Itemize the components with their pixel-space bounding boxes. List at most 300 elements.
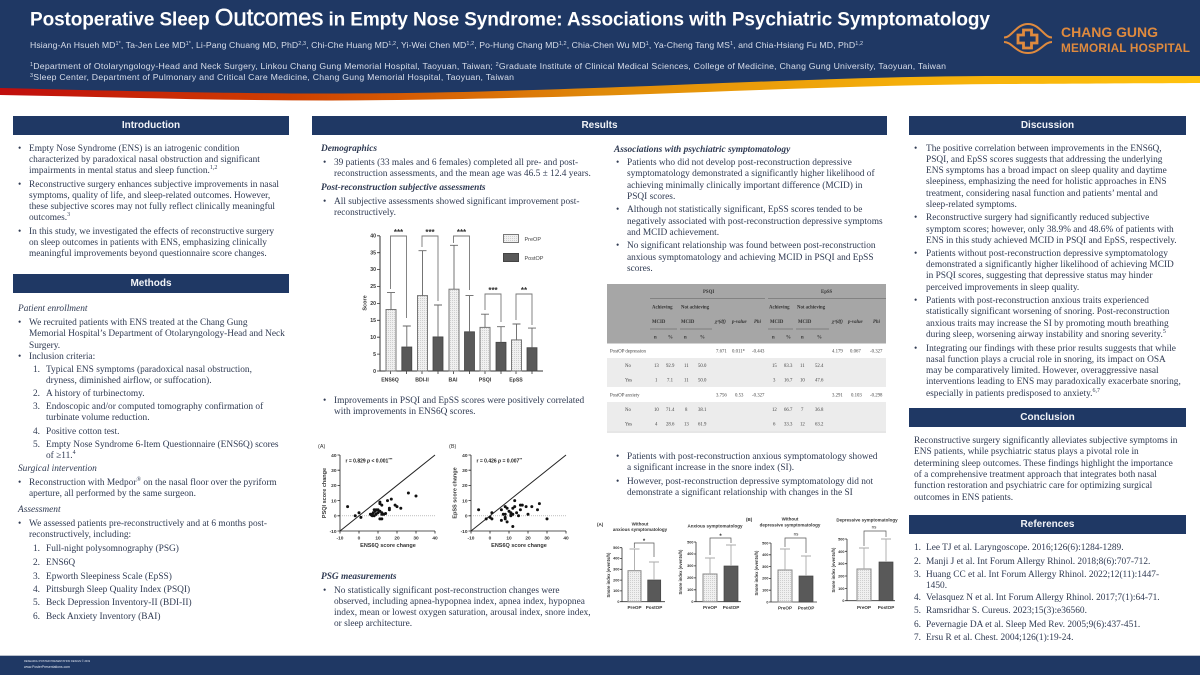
text: methods: aperture, all performed by the same surgeon. [29,489,196,499]
table: MCID achievement by psychiatric status: Phi [754,320,762,325]
text: discussion bullets: • [914,344,917,354]
text: snore index findings: Patients with post-reconstruction anxious symptomatology showed [627,452,877,462]
snore index chart A2: anxious symptomatology [678,524,743,610]
text: methods: 5. [33,598,40,608]
authors: 1,2 [855,41,863,47]
heading: Results: Results [581,120,618,131]
table: MCID achievement by psychiatric status: 13 [654,364,659,369]
text: PSG measurements: index, mean or lowest oxygen saturation, arousal index, snore index, [334,608,591,618]
text: methods: Typical ENS symptoms (paradoxical nasal obstruction, [46,365,252,375]
scatter plot A: PSQI vs ENS6Q change: 40 [432,536,438,542]
table: MCID achievement by psychiatric status: -0.327 [752,394,765,398]
table: MCID achievement by psychiatric status: 7.1 [667,378,674,384]
text: reference list: 1450. [926,581,947,591]
table: MCID achievement by psychiatric status: % [668,336,673,340]
text: PSG measurements: observed, including apnea-hypopnea index, apnea index, hypopnea [334,597,585,607]
text: introduction bullets: Empty Nose Syndrome (ENS) is an iatrogenic condition [29,144,239,154]
text: discussion bullets: may be comparatively limited. However, overaggressive nasal [926,366,1159,376]
text: demographics: 39 patients (33 males and 6 females) completed all pre- and post- [334,158,578,168]
text: methods: Pittsburgh Sleep Quality Index (PSQI) [46,585,190,595]
snore index chart A1: without anxious symptomatology: 200 [613,578,620,582]
bar chart: scores before and after surgery: ENS6Q [381,378,399,384]
text: demographics [320,144,591,218]
text: methods: Beck Depression Inventory-II (BDI-II) [46,598,192,608]
text: demographics: reconstructively. [334,208,396,218]
text: PSG measurements: PSG measurements [321,572,397,582]
table: MCID achievement by psychiatric status: % [700,336,705,340]
text: discussion bullets: • [914,249,917,259]
scatter plot B: EpSS vs ENS6Q change: 0 [465,514,468,520]
bar chart: scores before and after surgery: 40 [370,234,376,240]
authors: 1* [115,41,122,47]
text: methods: ENS6Q [46,558,75,568]
text: reference list: 7. [914,633,921,643]
snore index chart A1: without anxious symptomatology: anxious symptomatology [613,527,668,532]
text: introduction bullets: symptoms, quality of life, and sleep-related outcomes. However, [29,191,270,201]
heading: Conclusion [909,408,1186,427]
bar chart: scores before and after surgery: 10 [370,335,376,341]
scatter plot B: EpSS vs ENS6Q change: 30 [544,536,550,542]
snore index chart A1: without anxious symptomatology: 0 [617,600,620,604]
snore index chart B2: depressive symptomatology: PostOP [878,605,894,610]
table: MCID achievement by psychiatric status: Not achieving [797,306,826,310]
text: methods: 1. [33,365,40,375]
snore index chart B1: without depressive symptomatology: 400 [762,553,768,557]
snore index chart A2: anxious symptomatology: 0 [691,600,694,604]
text: discussion bullets: especially in patients predisposed to anxiety.6,7 [926,388,1100,399]
table: MCID achievement by psychiatric status: 52.4 [815,364,824,369]
scatter plot A: PSQI vs ENS6Q change: 20 [331,483,337,489]
table: MCID achievement by psychiatric status: 63.2 [815,422,824,428]
text: reference list: Ersu R et al. Chest. 2004;126(1):19-24. [926,633,1073,643]
text: reference list: Ramsridhar S. Cureus. 2023;15(3):e36560. [926,606,1087,616]
chart legend: PostOP [524,256,544,262]
table: MCID achievement by psychiatric status: 61.9 [698,422,707,428]
text: snore index findings: • [616,477,619,487]
authors: , Po-Hung Chang MD [474,40,559,50]
snore index chart A2: anxious symptomatology: 300 [687,564,694,568]
text: correlation finding: Improvements in PSQI and EpSS scores were positively correlated [334,396,584,406]
table: MCID achievement by psychiatric status: 92.9 [666,364,675,369]
text: correlation finding [323,396,584,417]
table: MCID achievement by psychiatric status: 1 [655,378,658,384]
text: discussion bullets: during sleep, worsening airway instability and snoring severity.5 [926,329,1166,340]
text: methods: We assessed patients pre-reconstructively and at 6 months post- [29,519,267,529]
table: MCID achievement by psychiatric status: 10 [654,408,659,413]
authors: , Ya-Cheng Tang MS [649,40,730,50]
snore index chart B1: without depressive symptomatology: 200 [762,576,768,580]
bar chart: scores before and after surgery: *** [394,228,404,237]
table: MCID achievement by psychiatric status: 0.011* [732,350,746,354]
table: MCID achievement by psychiatric status: 15 [772,364,777,369]
text: associations with psychiatric symptomatology: symptomatology demonstrated a significantly higher likelihood of [627,169,875,179]
table: MCID achievement by psychiatric status: 66.7 [784,408,793,413]
scatter plot B: EpSS vs ENS6Q change: ** [519,458,523,462]
table: MCID achievement by psychiatric status: 8 [685,408,688,413]
table: MCID achievement by psychiatric status: 3.291 [832,394,843,398]
bar chart: scores before and after surgery: 0 [373,369,376,375]
scatter plot A: PSQI vs ENS6Q change: r = 0.829 p < 0.001 [346,458,388,464]
affiliations line one: Graduate Institute of Clinical Medical Sciences, College of Medicine, Chang Gung University, Taoyuan, Taiwan [499,61,946,71]
scatter plot B: EpSS vs ENS6Q change: -10 [468,536,475,542]
snore index chart B1: without depressive symptomatology: Snore index (events/h) [754,550,759,595]
text: discussion bullets: Patients without post-reconstruction depressive symptomatology [926,249,1168,259]
text: associations with psychiatric symptomatology: • [616,205,619,215]
text: associations with psychiatric symptomatology: Although not statistically significant, EpSS scores tended to be [627,205,862,215]
text: associations with psychiatric symptomatology: • [616,241,619,251]
text: demographics: Demographics [321,144,377,154]
text: correlation finding: • [323,396,326,406]
snore index chart A1: without anxious symptomatology: PreOP [627,605,642,610]
table: MCID achievement by psychiatric status: 47.6 [815,378,824,384]
scatter plot B: EpSS vs ENS6Q change: (B) [449,444,456,450]
table: MCID achievement by psychiatric status: Yes [625,422,632,428]
text: snore index findings: demonstrate a significant relationship with changes in the SI [627,488,853,498]
bar chart: scores before and after surgery: BDI-II [415,378,429,384]
affiliations line one: 2 [496,62,499,68]
snore index chart B1: without depressive symptomatology: PostOP [798,606,814,610]
table: MCID achievement by psychiatric status: % [817,336,822,340]
table: MCID achievement by psychiatric status: 36.8 [815,408,824,413]
text: methods: A history of turbinectomy. [46,389,145,399]
table: MCID achievement by psychiatric status: -0.443 [752,350,765,354]
table: MCID achievement by psychiatric status: Achieving [652,306,673,310]
bar chart: scores before and after surgery: EpSS [509,378,523,384]
snore index chart B2: depressive symptomatology: Depressive symptomatology [836,518,898,522]
snore index chart A2: anxious symptomatology: Anxious symptomatology [687,524,743,528]
bar chart: scores before and after surgery: Score [362,295,368,311]
scatter plot B: EpSS vs ENS6Q change: 10 [506,536,512,542]
text: demographics: • [323,197,326,207]
text: methods: 1. [33,544,40,554]
table: MCID achievement by psychiatric status: 50.0 [698,364,707,369]
scatter plot B: EpSS vs ENS6Q change: 10 [462,498,468,504]
text: methods: Epworth Sleepiness Scale (EpSS) [46,572,172,582]
text: associations with psychiatric symptomatology: achieving minimally clinically important difference (MCID) in [627,181,862,191]
text: discussion bullets: PSQI, and EpSS scores suggests that addressing the underlying [926,155,1162,165]
table: MCID achievement by psychiatric status [607,284,886,432]
authors: 1 [646,41,649,47]
snore index chart B2: depressive symptomatology: ns [872,524,877,530]
scatter plot A: PSQI vs ENS6Q change: 40 [331,453,337,459]
snore index chart B1: without depressive symptomatology: depressive symptomatology [760,522,821,528]
text: methods: • [18,519,21,529]
table: MCID achievement by psychiatric status: -0.298 [870,394,883,398]
table: MCID achievement by psychiatric status: PostOP depression [610,350,647,354]
table: MCID achievement by psychiatric status: 0.103 [851,394,862,398]
text: associations with psychiatric symptomatology: anxious symptomatology and achieving MCID in PSQI and EpSS [627,253,874,263]
table: MCID achievement by psychiatric status: 28.6 [666,422,675,428]
logo: Chang Gung Memorial Hospital: MEMORIAL HOSPITAL [1061,41,1190,55]
text: methods: 4. [33,585,40,595]
table: MCID achievement by psychiatric status: MCID [798,320,812,325]
scatter plot A: PSQI vs ENS6Q change: 10 [375,536,381,542]
table: MCID achievement by psychiatric status: p-value [731,320,748,325]
text: discussion bullets: The positive correlation between improvements in the ENS6Q, [926,144,1162,154]
bar chart: scores before and after surgery: *** [488,286,499,295]
text: methods: • [18,478,21,488]
text: reference list: 6. [914,620,921,630]
text: methods: Full-night polysomnography (PSG) [46,544,179,554]
text: snore index findings: However, post-reconstruction depressive symptomatology did not [627,477,873,487]
table: MCID achievement by psychiatric status: χ²(df) [714,319,726,325]
table: MCID achievement by psychiatric status: 7 [801,408,804,413]
scatter plot A: PSQI vs ENS6Q change: PSQI score change [322,468,328,518]
text: discussion bullets: • [914,213,917,223]
table: MCID achievement by psychiatric status: 11 [684,364,689,369]
text: discussion bullets: • [914,144,917,154]
snore index chart B2: depressive symptomatology: 100 [838,587,844,591]
snore index chart A1: without anxious symptomatology: 100 [613,589,620,593]
text: methods: reconstructively, including: [29,530,131,540]
snore index chart A2: anxious symptomatology: 500 [687,540,694,544]
snore index chart B2: depressive symptomatology: PreOP [857,605,871,610]
scatter plot A: PSQI vs ENS6Q change: 10 [331,498,337,504]
snore index chart A1: without anxious symptomatology: 500 [613,546,620,550]
scatter plot B: EpSS vs ENS6Q change: 40 [563,536,569,542]
table: MCID achievement by psychiatric status: 10 [800,378,805,384]
authors: , Ta-Jen Lee MD [121,40,186,50]
snore index chart A2: anxious symptomatology: PostOP [723,605,739,610]
heading: Methods: Methods [130,278,172,289]
text: associations with psychiatric symptomatology: scores. [627,264,653,274]
bar chart: scores before and after surgery: 20 [370,301,376,307]
text: methods: Surgical intervention [18,464,97,474]
heading: Introduction [13,116,289,135]
table: MCID achievement by psychiatric status: n [801,336,804,340]
text: associations with psychiatric symptomatology [614,145,883,274]
table: MCID achievement by psychiatric status: p-value [847,320,864,325]
table: MCID achievement by psychiatric status: 4.179 [832,350,843,354]
text: demographics: Post-reconstruction subjective assessments [321,183,486,193]
table: MCID achievement by psychiatric status: 16.7 [784,378,793,384]
text: methods: 3. [33,572,40,582]
text: correlation finding: with improvements in ENS6Q scores. [334,407,475,417]
table: MCID achievement by psychiatric status: 38.1 [698,408,707,413]
table: MCID achievement by psychiatric status: Yes [625,378,632,384]
text: discussion bullets: anxious traits may increase the SI by promoting mouth breathing [926,319,1169,329]
text: demographics: All subjective assessments showed significant improvement post- [334,197,580,207]
authors: 1,2 [388,41,396,47]
heading: Discussion [909,116,1186,135]
table: MCID achievement by psychiatric status: 83.3 [784,364,793,369]
scatter plot A: PSQI vs ENS6Q change: *** [388,458,393,462]
text: conclusion: determining sleep outcomes. These findings highlight the importance [914,459,1173,469]
table: MCID achievement by psychiatric status: n [684,336,687,340]
text: methods: 4. [33,427,40,437]
text: demographics: • [323,158,326,168]
heading: References [909,515,1186,534]
text: discussion bullets: in PSQI scores, suggesting that depressive status may hinder [926,271,1153,281]
title: Postoperative Sleep Outcomes in Empty Nose Syndrome: Associations with Psychiatric Symptomatology [30,4,990,32]
bar chart: scores before and after surgery: 15 [370,318,376,324]
table: MCID achievement by psychiatric status: PSQI [703,290,714,295]
heading: Conclusion: Conclusion [1020,412,1075,423]
table: MCID achievement by psychiatric status: 0.53 [735,394,744,398]
authors: 1* [186,41,192,47]
snore index chart B1: without depressive symptomatology: ns [794,532,799,536]
text: methods: Beck Anxiety Inventory (BAI) [46,612,160,622]
text: conclusion: function restoration and psychiatric care for optimizing surgical [914,481,1152,491]
text: introduction bullets: on sleep outcomes in patients with ENS, emphasizing clinically [29,238,267,248]
table: MCID achievement by psychiatric status: Achieving [769,306,790,310]
text: reference list: Lee TJ et al. Laryngoscope. 2016;126(6):1284-1289. [926,543,1124,553]
text: introduction bullets: characterized by paradoxical nasal obstruction and significant [29,155,260,165]
text: methods [18,304,285,622]
scatter plot B: EpSS vs ENS6Q change: 20 [462,483,468,489]
bar chart: scores before and after surgery: 35 [370,250,376,256]
scatter plot B: EpSS vs ENS6Q change: 30 [462,468,468,474]
affiliations line two: Sleep Center, Department of Pulmonary and Critical Care Medicine, Chang Gung Memorial Hospital, Taoyuan, Taiwan [33,72,514,82]
table: MCID achievement by psychiatric status: n [654,336,657,340]
text: PSG measurements: • [323,586,326,596]
text: methods: Positive cotton test. [46,427,119,437]
logo: Chang Gung Memorial Hospital [1004,24,1190,55]
text: introduction bullets [18,144,279,259]
snore index chart B2: depressive symptomatology: 500 [838,538,844,542]
snore index chart A2: anxious symptomatology: * [719,534,722,540]
text: discussion bullets: ENS symptoms has a broad impact on sleep quality and daytime [926,166,1167,176]
snore index chart A1: without anxious symptomatology [597,522,668,610]
table: MCID achievement by psychiatric status: % [786,336,791,340]
text: methods: Surgery. [29,341,60,351]
text: associations with psychiatric symptomatology: No significant relationship was found between post-reconstruction [627,241,876,251]
text: discussion bullets: demonstrated a significantly higher likelihood of achieving MCID [926,260,1174,270]
bar chart: scores before and after surgery: 25 [370,284,376,290]
text: associations with psychiatric symptomatology: Associations with psychiatric symptomatology [614,145,790,155]
text: methods: Memorial Hospital’s Department of Otolaryngology-Head and Neck [29,329,285,339]
scatter plot A: PSQI vs ENS6Q change: -10 [330,529,337,535]
scatter plot B: EpSS vs ENS6Q change: 20 [525,536,531,542]
text: discussion bullets: sleepiness, emphasizing the need for holistic approaches in ENS [926,177,1167,187]
snore index chart B1: without depressive symptomatology: 500 [762,542,768,546]
text: PSG measurements: No statistically significant post-reconstruction changes were [334,586,559,596]
table: MCID achievement by psychiatric status: 33.3 [784,422,793,428]
snore index chart B1: without depressive symptomatology: PreOP [778,606,792,610]
authors: 2,3 [298,41,306,47]
snore index chart B2: depressive symptomatology: 0 [842,599,844,603]
bar chart: scores before and after surgery: ** [521,286,528,295]
text: conclusion [914,436,1178,503]
table: MCID achievement by psychiatric status: -0.327 [870,350,883,354]
text: discussion bullets: perceived improvements in sleep quality. [926,283,1079,293]
text: methods: Empty Nose Syndrome 6-Item Questionnaire (ENS6Q) scores [46,440,279,450]
bar chart: scores before and after surgery: PSQI [479,378,492,384]
table: MCID achievement by psychiatric status: MCID [681,320,695,325]
scatter plot B: EpSS vs ENS6Q change: 40 [462,453,468,459]
text: discussion bullets: nasal function plays a crucial role in snoring, its impact on OSA [926,355,1166,365]
footer credit: www.PosterPresentations.com [24,664,70,668]
snore index chart B1: without depressive symptomatology: Without [782,516,799,522]
text: discussion bullets: symptom scores; however, only 38.9% and 48.6% of patients with [926,225,1174,235]
scatter plot B: EpSS vs ENS6Q change: ENS6Q score change [491,543,547,549]
text: discussion bullets: Integrating our findings with these prior results suggests that while [926,344,1176,354]
table: MCID achievement by psychiatric status: 3 [773,378,776,384]
text: methods: Inclusion criteria: [29,352,95,362]
heading: Results [312,116,887,135]
header banner [0,0,1200,100]
text: PSG measurements: or sleep architecture. [334,619,412,629]
table: MCID achievement by psychiatric status: 3.756 [716,394,727,398]
text: conclusion: ENS patients, while psychiatric status plays a pivotal role in [914,447,1139,457]
bar chart: scores before and after surgery [362,228,544,384]
text: methods: 3. [33,402,40,412]
text: methods: • [18,318,21,328]
text: methods: • [18,352,21,362]
text: snore index findings: • [616,452,619,462]
text: associations with psychiatric symptomatology: • [616,158,619,168]
table: MCID achievement by psychiatric status: No [625,408,631,413]
table: MCID achievement by psychiatric status: PostOP anxiety [610,394,640,398]
text: discussion bullets: Reconstructive surgery had significantly reduced subjective [926,213,1149,223]
snore index chart A1: without anxious symptomatology: PostOP [646,605,662,610]
table: MCID achievement by psychiatric status: Phi [873,320,881,325]
text: methods: Endoscopic and/or computed tomography confirmation of [46,402,263,412]
snore index chart A1: without anxious symptomatology: * [643,539,646,545]
text: reference list: Manji J et al. Int Forum Allergy Rhinol. 2018;8(6):707-712. [926,557,1150,567]
snore index chart A1: without anxious symptomatology: 400 [613,557,620,561]
text: snore index findings [616,452,878,498]
text: PSG measurements [321,572,591,629]
text: methods: 2. [33,558,40,568]
scatter plot A: PSQI vs ENS6Q change: 30 [331,468,337,474]
text: introduction bullets: • [18,144,21,154]
affiliations line one: Department of Otolaryngology-Head and Neck Surgery, Linkou Chang Gung Memorial Hospital, Taoyuan, Taiwan; [33,61,495,71]
table: MCID achievement by psychiatric status: No [625,364,631,369]
text: reference list: 1. [914,543,921,553]
snore index chart B1: without depressive symptomatology: 0 [766,600,768,604]
snore index chart A1: without anxious symptomatology: (A) [597,522,604,527]
text: discussion bullets: interventions leading to ENS may paradoxically exacerbate snoring, [926,377,1181,387]
text: reference list: 2. [914,557,921,567]
text: associations with psychiatric symptomatology: negatively associated with post-reconstruction depressive symptoms [627,217,883,227]
snore index chart A1: without anxious symptomatology: 300 [613,568,620,572]
bar chart: scores before and after surgery: BAI [449,378,458,384]
table: MCID achievement by psychiatric status: 11 [800,364,805,369]
table: MCID achievement by psychiatric status: MCID [652,320,666,325]
text: methods: 5. [33,440,40,450]
scatter plot B: EpSS vs ENS6Q change: r = 0.426 p = 0.007 [476,458,519,464]
bar chart: scores before and after surgery: 5 [373,352,376,358]
table: MCID achievement by psychiatric status: 50.0 [698,378,707,384]
scatter plot B: EpSS vs ENS6Q change: EpSS score change [452,467,458,519]
snore index chart B2: depressive symptomatology: 300 [838,562,844,566]
scatter plot A: PSQI vs ENS6Q change: -10 [337,536,344,542]
snore index chart A2: anxious symptomatology: Snore index (events/h) [678,549,683,594]
authors: Hsiang-An Hsueh MD [30,40,115,50]
text: methods: Patient enrollment [18,304,87,314]
text: introduction bullets: • [18,227,21,237]
authors: , Chia-Chen Wu MD [567,40,646,50]
snore index chart B1: without depressive symptomatology: 300 [762,565,768,569]
table: MCID achievement by psychiatric status: 6 [773,422,776,428]
table: MCID achievement by psychiatric status: 12 [800,422,805,428]
text: introduction bullets: Reconstructive surgery enhances subjective improvements in nasal [29,180,279,190]
authors: 1,2 [559,41,567,47]
bar chart: scores before and after surgery: *** [457,228,467,237]
authors: 1 [730,41,733,47]
text: associations with psychiatric symptomatology: PSQI scores. [627,192,675,202]
text: introduction bullets: In this study, we investigated the effects of reconstructive surgery [29,227,274,237]
snore index chart A1: without anxious symptomatology: Snore index (events/h) [606,552,611,597]
text: associations with psychiatric symptomatology: and MCID achievement. [627,228,719,238]
text: methods: 2. [33,389,40,399]
heading: References: References [1021,519,1074,530]
footer credit [24,660,90,668]
text: methods: We recruited patients with ENS treated at the Chang Gung [29,318,248,328]
text: methods: of ≥11.4 [46,450,76,461]
authors: , Li-Pang Chuang MD, PhD [191,40,298,50]
